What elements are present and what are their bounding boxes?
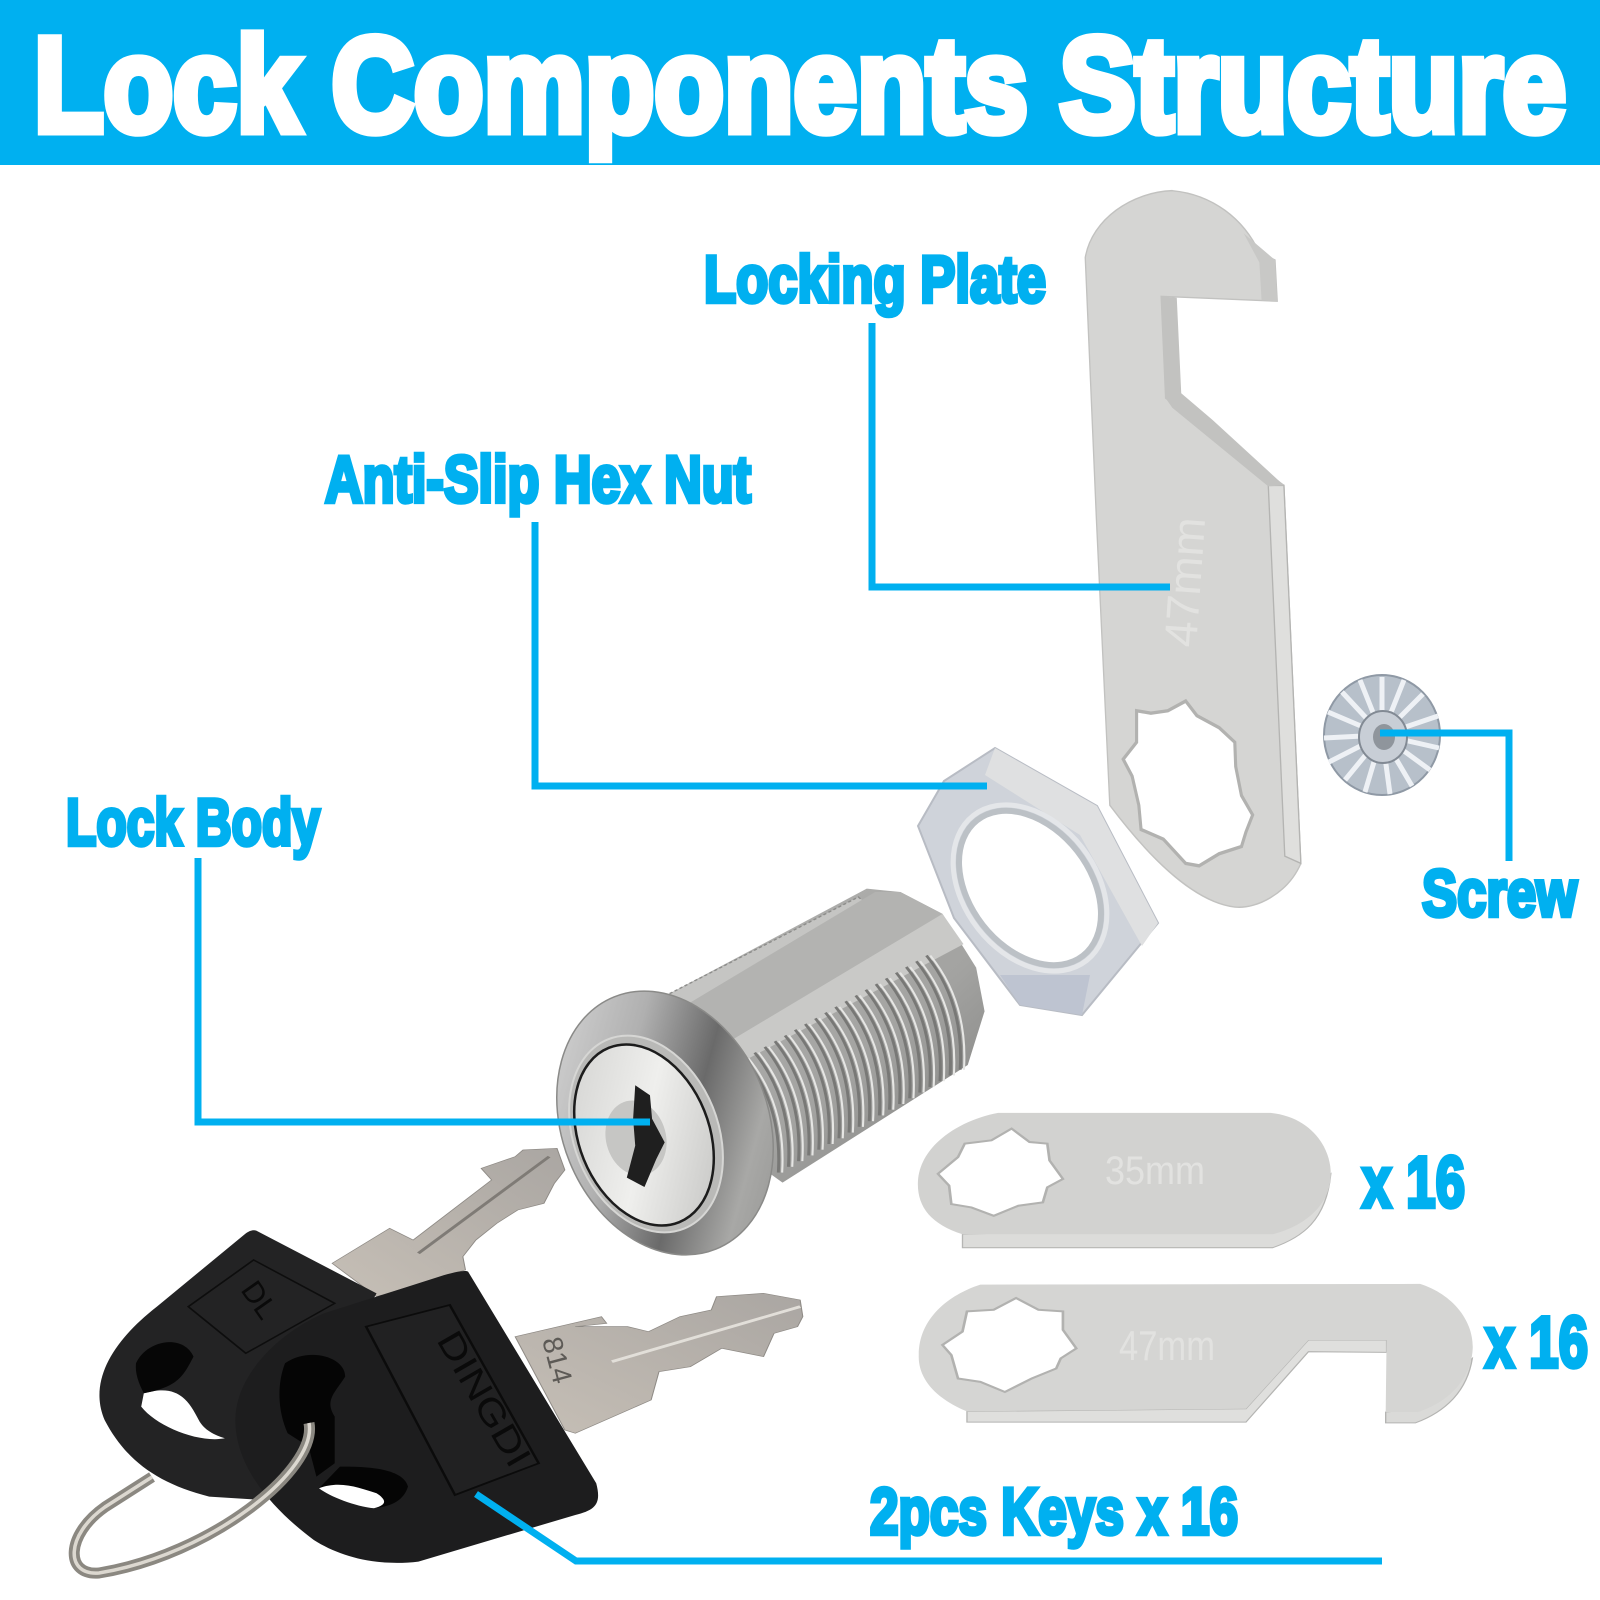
label: 35mm quantity: x 16 bbox=[1362, 1143, 1465, 1223]
back key brand: DL bbox=[234, 1275, 283, 1325]
back key panel bbox=[188, 1260, 335, 1353]
side band bbox=[724, 914, 964, 1065]
back key bbox=[99, 1148, 565, 1500]
knurl strip bbox=[665, 897, 867, 1006]
back key groove bbox=[418, 1157, 549, 1253]
front key groove bbox=[612, 1307, 800, 1362]
keyhole bbox=[627, 1085, 665, 1187]
anti-slip hex nut bbox=[918, 748, 1158, 1015]
label: locking plate: Locking Plate bbox=[704, 242, 1046, 316]
47mm engraving: 47mm bbox=[1119, 1322, 1215, 1369]
front key blade bbox=[515, 1293, 803, 1433]
label: lock body: Lock Body bbox=[66, 785, 320, 859]
leader: keys bbox=[476, 1494, 1382, 1561]
screw bbox=[1324, 675, 1440, 795]
flat face bbox=[686, 892, 942, 1045]
front key brand: DINGDI bbox=[429, 1324, 540, 1474]
locking plate vertical bbox=[1085, 191, 1301, 907]
back key blade bbox=[332, 1148, 565, 1297]
leader: hex nut bbox=[535, 522, 987, 786]
split ring bbox=[74, 1423, 310, 1573]
threads bbox=[745, 956, 964, 1173]
front key panel outline bbox=[366, 1305, 539, 1495]
back key head bbox=[99, 1230, 377, 1500]
plate 47mm bbox=[919, 1284, 1473, 1423]
front key bbox=[235, 1271, 803, 1563]
back key lower hole bbox=[141, 1390, 225, 1439]
key plug bbox=[597, 1094, 675, 1182]
label: hex nut: Anti-Slip Hex Nut bbox=[325, 442, 751, 516]
lock body bbox=[519, 889, 985, 1288]
plate 35mm bbox=[918, 1113, 1331, 1248]
title banner bbox=[0, 0, 1600, 165]
front key number: 814 bbox=[536, 1334, 578, 1387]
plate engraving: 47mm bbox=[1154, 515, 1215, 649]
leader: lock body bbox=[198, 858, 650, 1122]
key cylinder face bbox=[549, 1023, 739, 1247]
front key holes bbox=[279, 1355, 345, 1477]
cylinder bbox=[665, 889, 985, 1183]
leader: locking plate bbox=[872, 323, 1170, 587]
flange bbox=[519, 958, 811, 1288]
flange inner bevel bbox=[541, 1012, 751, 1256]
front key head bbox=[235, 1271, 598, 1563]
35mm engraving: 35mm bbox=[1105, 1149, 1205, 1193]
leader: screw bbox=[1380, 733, 1509, 861]
label: keys: 2pcs Keys x 16 bbox=[870, 1474, 1238, 1548]
